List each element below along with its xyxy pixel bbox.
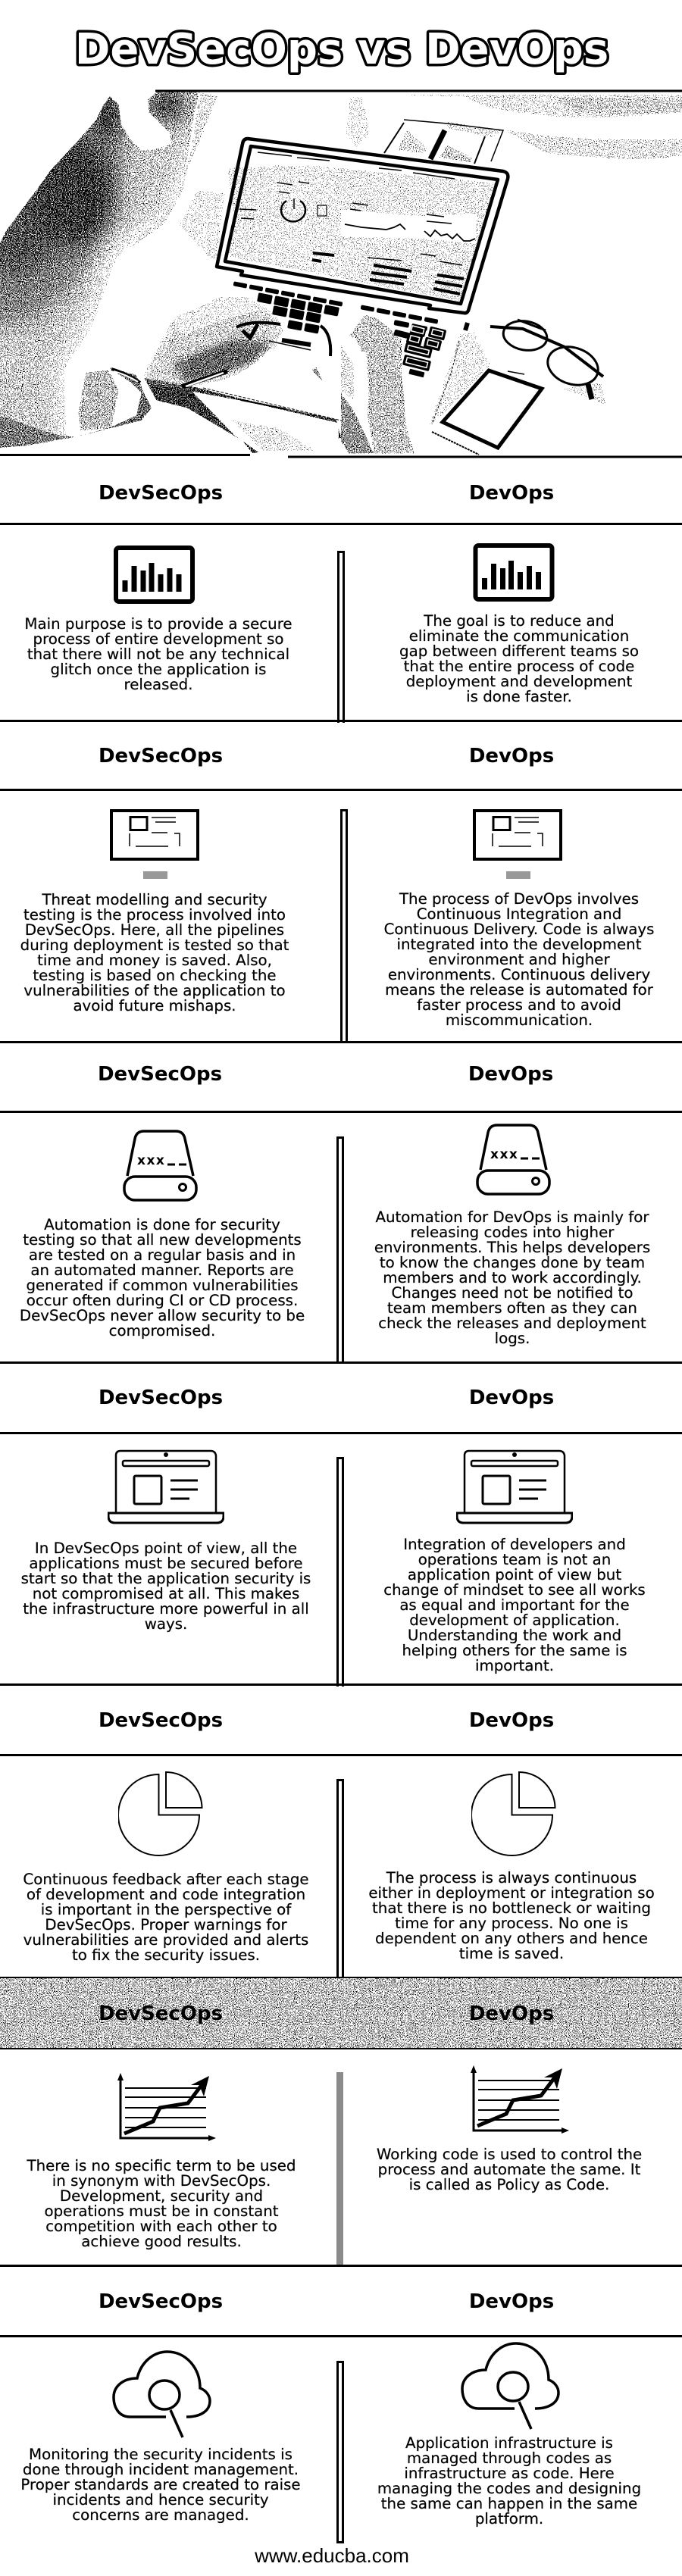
heading: DevSecOps: DevSecOps bbox=[98, 1063, 222, 1086]
text: DevSecOps automation: Automation is done for security bbox=[44, 1216, 280, 1233]
tablet behind laptop bbox=[384, 120, 503, 164]
text: DevSecOps synonym: Development, security and bbox=[60, 2187, 263, 2205]
rule bbox=[0, 1361, 682, 1364]
text: DevOps infrastructure as code: Application infrastructure is bbox=[405, 2434, 613, 2452]
footer url: www.educba.com bbox=[255, 2544, 409, 2567]
text: DevOps CI and CD: miscommunication. bbox=[446, 1011, 593, 1029]
text: DevOps continuous process: dependent on any others and hence bbox=[375, 1930, 648, 1947]
text: DevOps CI and CD bbox=[384, 890, 654, 1029]
text: DevSecOps feedback: Continuous feedback after each stage bbox=[23, 1870, 309, 1888]
text: DevSecOps automation bbox=[20, 1216, 305, 1340]
icon: rising chart right bbox=[471, 2065, 569, 2134]
screen tone bbox=[227, 165, 495, 302]
rule bbox=[0, 2335, 682, 2337]
text: DevSecOps purpose bbox=[24, 615, 293, 693]
text: DevSecOps synonym: operations must be in constant bbox=[44, 2202, 279, 2220]
heading: DevSecOps: DevSecOps bbox=[99, 1709, 223, 1732]
text: DevOps continuous process bbox=[368, 1868, 655, 1962]
text: DevOps CI and CD: Continuous Integration and bbox=[417, 905, 621, 923]
text: DevOps integration: helping others for the same is bbox=[402, 1642, 627, 1659]
text: DevSecOps purpose: that there will not be any technical bbox=[27, 646, 289, 663]
text: DevSecOps threat modelling: DevSecOps. Here, all the pipelines bbox=[25, 921, 284, 939]
text: DevOps continuous process: time for any process. No one is bbox=[395, 1915, 628, 1932]
text: DevOps continuous process: that there is no bottleneck or waiting bbox=[372, 1899, 651, 1917]
text: DevSecOps synonym bbox=[27, 2157, 296, 2250]
text: DevOps purpose: deployment and development bbox=[406, 673, 632, 690]
laptop edge details bbox=[465, 323, 468, 330]
heading: DevSecOps: DevSecOps bbox=[99, 482, 223, 505]
rule bbox=[0, 1683, 682, 1686]
rule bbox=[0, 1754, 682, 1756]
heading: DevSecOps: DevSecOps bbox=[99, 2290, 223, 2313]
text: DevSecOps feedback: to fix the security issues. bbox=[72, 1946, 260, 1964]
text: DevSecOps automation: compromised. bbox=[109, 1322, 215, 1340]
trackpad light tone bbox=[227, 351, 313, 413]
text: DevSecOps purpose: glitch once the application is bbox=[51, 661, 266, 678]
text: DevSecOps point of view: In DevSecOps point of view, all the bbox=[35, 1540, 297, 1557]
rule bbox=[0, 2265, 682, 2267]
text: DevOps integration bbox=[383, 1536, 646, 1674]
heading: DevOps: DevOps bbox=[469, 482, 554, 505]
heading: DevOps: DevOps bbox=[469, 1709, 554, 1732]
title: DevSecOps vs DevOps bbox=[75, 25, 608, 74]
heading: DevSecOps: DevSecOps bbox=[99, 1386, 223, 1409]
text: DevSecOps synonym: There is no specific term to be used bbox=[27, 2157, 296, 2174]
text: DevSecOps feedback: is important in the perspective of bbox=[41, 1901, 291, 1918]
text: DevOps purpose bbox=[399, 612, 639, 705]
crisp line art bbox=[0, 91, 682, 457]
divider bbox=[336, 1457, 344, 1687]
text: DevSecOps synonym: competition with each other to bbox=[45, 2218, 277, 2235]
text: DevSecOps feedback: of development and code integration bbox=[27, 1886, 305, 1903]
rule bbox=[0, 789, 682, 791]
text: DevSecOps point of view: applications must be secured before bbox=[29, 1555, 303, 1572]
keyboard key highlights bbox=[406, 326, 443, 367]
text: DevOps CI and CD: environment and higher bbox=[428, 951, 610, 968]
text: DevOps infrastructure as code: platform. bbox=[475, 2510, 543, 2528]
text: DevOps automation: members and to work accordingly. bbox=[383, 1269, 642, 1286]
text: DevOps CI and CD: integrated into the development bbox=[397, 936, 641, 953]
text: DevOps integration: Understanding the work and bbox=[408, 1627, 621, 1644]
icon: rising chart left bbox=[117, 2073, 216, 2141]
text: DevOps infrastructure as code: managing the codes and designing bbox=[377, 2480, 641, 2497]
text: DevOps integration: operations team is not an bbox=[418, 1551, 611, 1568]
text: DevOps automation: check the releases and deployment bbox=[378, 1315, 646, 1332]
text: DevOps automation: Changes need not be notified to bbox=[391, 1284, 633, 1302]
text: DevOps infrastructure as code: managed through codes as bbox=[407, 2449, 612, 2467]
icon: cloud search left bbox=[112, 2350, 211, 2438]
rule bbox=[0, 720, 682, 722]
text: DevOps infrastructure as code: infrastructure as code. Here bbox=[404, 2465, 615, 2482]
text: DevSecOps monitoring: Proper standards are created to raise bbox=[20, 2476, 301, 2493]
rule bbox=[0, 523, 682, 525]
icon: drive left: xxx bbox=[137, 1153, 165, 1168]
text: DevSecOps monitoring: concerns are managed. bbox=[72, 2506, 249, 2524]
text: DevSecOps threat modelling: avoid future mishaps. bbox=[73, 997, 236, 1014]
panel 4: infrastructure and mindset bbox=[21, 1386, 646, 1687]
text: DevSecOps monitoring: Monitoring the security incidents is bbox=[29, 2446, 293, 2463]
panel 7: monitoring and infrastructure as code bbox=[20, 2290, 641, 2543]
text: DevSecOps automation: generated if common vulnerabilities bbox=[26, 1277, 299, 1294]
text: DevSecOps feedback: vulnerabilities are provided and alerts bbox=[23, 1931, 308, 1949]
right arm shadow bbox=[312, 360, 341, 413]
text: DevOps CI and CD: faster process and to avoid bbox=[417, 996, 621, 1014]
text: DevSecOps automation: an automated manner. Reports are bbox=[30, 1261, 294, 1279]
text: DevSecOps automation: testing so that all new developments bbox=[23, 1231, 302, 1249]
text: DevSecOps monitoring bbox=[20, 2446, 301, 2524]
text: DevSecOps threat modelling: testing is the process involved into bbox=[23, 906, 286, 924]
text: DevOps CI and CD: Continuous Delivery. Code is always bbox=[384, 921, 654, 938]
window-side shade bbox=[116, 92, 217, 261]
text: DevSecOps feedback: DevSecOps. Proper warnings for bbox=[45, 1916, 287, 1934]
divider bbox=[340, 809, 348, 1043]
text: DevOps continuous process: time is saved. bbox=[459, 1945, 564, 1962]
text: DevOps infrastructure as code: the same can happen in the same bbox=[381, 2495, 637, 2512]
tablet tones bbox=[398, 130, 427, 153]
text: DevOps purpose: is done faster. bbox=[466, 688, 572, 705]
text: DevSecOps threat modelling: testing is based on checking the bbox=[33, 967, 277, 984]
text: DevSecOps automation: occur often during CI or CD process. bbox=[27, 1292, 298, 1309]
text: DevOps automation: logs. bbox=[495, 1330, 530, 1347]
heading: DevOps: DevOps bbox=[469, 745, 554, 767]
text: DevSecOps point of view: not compromised at all. This makes bbox=[33, 1585, 299, 1602]
frame lines bbox=[155, 89, 682, 92]
text: DevOps automation: team members often as they can bbox=[387, 1299, 637, 1317]
icon: drive left bbox=[123, 1130, 198, 1202]
text: DevSecOps automation: DevSecOps never allow security to be bbox=[20, 1307, 305, 1324]
text: DevOps automation: environments. This helps developers bbox=[374, 1239, 650, 1256]
text: DevSecOps synonym: in synonym with DevSecOps. bbox=[52, 2172, 271, 2190]
icon: monitor left bbox=[110, 809, 199, 879]
text: DevOps CI and CD: The process of DevOps involves bbox=[399, 890, 639, 908]
heading: DevSecOps: DevSecOps bbox=[99, 2002, 223, 2025]
text: DevOps continuous process: either in deployment or integration so bbox=[368, 1884, 655, 1902]
heading: DevOps: DevOps bbox=[469, 1386, 554, 1409]
text: DevOps CI and CD: environments. Continuous delivery bbox=[388, 966, 650, 983]
text: DevOps policy as code: Working code is used to control the bbox=[377, 2146, 642, 2163]
panel 2: process bbox=[20, 745, 654, 1041]
text: DevSecOps threat modelling: vulnerabilities of the application to bbox=[23, 982, 286, 999]
text: DevSecOps purpose: process of entire development so bbox=[33, 630, 283, 648]
sleeve shadow bbox=[144, 377, 341, 453]
screen tone left bbox=[252, 165, 341, 274]
text: DevOps purpose: eliminate the communication bbox=[409, 627, 629, 645]
heading: DevOps: DevOps bbox=[468, 1063, 553, 1086]
rule bbox=[0, 1041, 682, 1043]
icon: bar chart right bbox=[473, 543, 555, 602]
text: DevOps purpose: that the entire process of code bbox=[404, 658, 634, 675]
text: DevOps purpose: The goal is to reduce and bbox=[424, 612, 615, 630]
text: DevSecOps point of view bbox=[21, 1540, 311, 1633]
text: DevSecOps point of view: the infrastructure more powerful in all bbox=[23, 1600, 309, 1618]
text: DevOps integration: application point of view but bbox=[408, 1566, 621, 1583]
rule bbox=[0, 1432, 682, 1434]
text: DevSecOps feedback bbox=[23, 1870, 309, 1964]
divider bbox=[336, 1136, 344, 1364]
divider bbox=[336, 2072, 343, 2265]
text: DevOps automation: to know the changes done by team bbox=[380, 1254, 645, 1271]
text: DevSecOps threat modelling: time and money is saved. Also, bbox=[37, 952, 272, 969]
text: DevSecOps point of view: start so that the application security is bbox=[21, 1570, 311, 1587]
phone screen bbox=[443, 370, 542, 448]
dithered tones bbox=[0, 77, 682, 466]
body / arm bbox=[0, 92, 199, 448]
photo: hands typing on a laptop with tablet, phone and glasses bbox=[0, 89, 682, 458]
text: DevOps automation: Automation for DevOps is mainly for bbox=[375, 1208, 649, 1226]
text: DevOps purpose: gap between different teams so bbox=[399, 642, 639, 660]
text: DevSecOps automation: are tested on a regular basis and in bbox=[29, 1246, 296, 1264]
text: DevOps automation: releasing codes into higher bbox=[411, 1224, 614, 1241]
panel 6: synonyms and policy as code bbox=[27, 2002, 642, 2265]
text: DevSecOps purpose: Main purpose is to provide a secure bbox=[24, 615, 293, 633]
table shadows top right bbox=[324, 92, 470, 119]
rule bbox=[0, 1111, 682, 1113]
text: DevOps policy as code bbox=[377, 2146, 642, 2193]
text: DevSecOps purpose: released. bbox=[124, 676, 192, 693]
icon: laptop right bbox=[456, 1450, 573, 1524]
text: DevOps integration: important. bbox=[475, 1657, 554, 1674]
laptop base / phone surround bbox=[430, 332, 490, 426]
text: DevSecOps threat modelling: during deployment is tested so that bbox=[20, 936, 289, 954]
screen contents bbox=[239, 152, 475, 294]
icon: drive right bbox=[476, 1124, 551, 1196]
hand lines bbox=[111, 323, 341, 420]
divider bbox=[336, 2361, 344, 2543]
glasses bbox=[490, 317, 603, 399]
icon: cloud search right bbox=[461, 2342, 560, 2430]
text: DevSecOps threat modelling bbox=[20, 891, 289, 1014]
panel 1: goal bbox=[24, 482, 639, 723]
text: DevOps integration: change of mindset to see all works bbox=[383, 1581, 646, 1599]
text: DevSecOps monitoring: incidents and hence security bbox=[52, 2491, 269, 2509]
right hand bbox=[341, 314, 415, 453]
laptop lid bbox=[217, 139, 508, 313]
text: DevOps policy as code: is called as Policy as Code. bbox=[409, 2176, 609, 2193]
text: DevOps CI and CD: means the release is automated for bbox=[385, 981, 653, 999]
panel 5: continuous feedback bbox=[23, 1709, 655, 1977]
text: DevSecOps threat modelling: Threat modelling and security bbox=[42, 891, 267, 908]
divider bbox=[336, 1779, 344, 1980]
icon: laptop left bbox=[108, 1450, 224, 1524]
divider bbox=[337, 551, 345, 723]
icon: monitor right bbox=[473, 809, 562, 879]
text: DevOps continuous process: The process is always continuous bbox=[386, 1868, 637, 1887]
heading: DevOps: DevOps bbox=[469, 2290, 554, 2313]
icon: drive right: xxx bbox=[490, 1147, 518, 1162]
left hand bbox=[144, 307, 283, 384]
text: DevSecOps point of view: ways. bbox=[145, 1615, 187, 1633]
text: DevOps policy as code: process and automate the same. It bbox=[378, 2161, 640, 2178]
text: DevOps integration: Integration of developers and bbox=[403, 1536, 626, 1553]
heading: DevOps: DevOps bbox=[469, 2002, 554, 2025]
keyboard bbox=[233, 281, 446, 377]
text: DevOps automation bbox=[374, 1208, 650, 1347]
icon: pie chart right bbox=[471, 1771, 556, 1856]
dithered gray band bbox=[0, 1977, 682, 2049]
text: DevSecOps synonym: achieve good results. bbox=[81, 2233, 242, 2250]
text: DevOps infrastructure as code bbox=[377, 2434, 641, 2528]
heading: DevSecOps: DevSecOps bbox=[99, 745, 223, 767]
text: DevOps integration: development of application. bbox=[409, 1612, 620, 1629]
text: DevOps integration: as equal and important for the bbox=[399, 1596, 630, 1614]
icon: bar chart left bbox=[114, 546, 195, 604]
text: DevSecOps monitoring: done through incident management. bbox=[23, 2461, 299, 2478]
icon: pie chart left bbox=[118, 1771, 203, 1856]
panel 3: automation bbox=[20, 1063, 650, 1361]
